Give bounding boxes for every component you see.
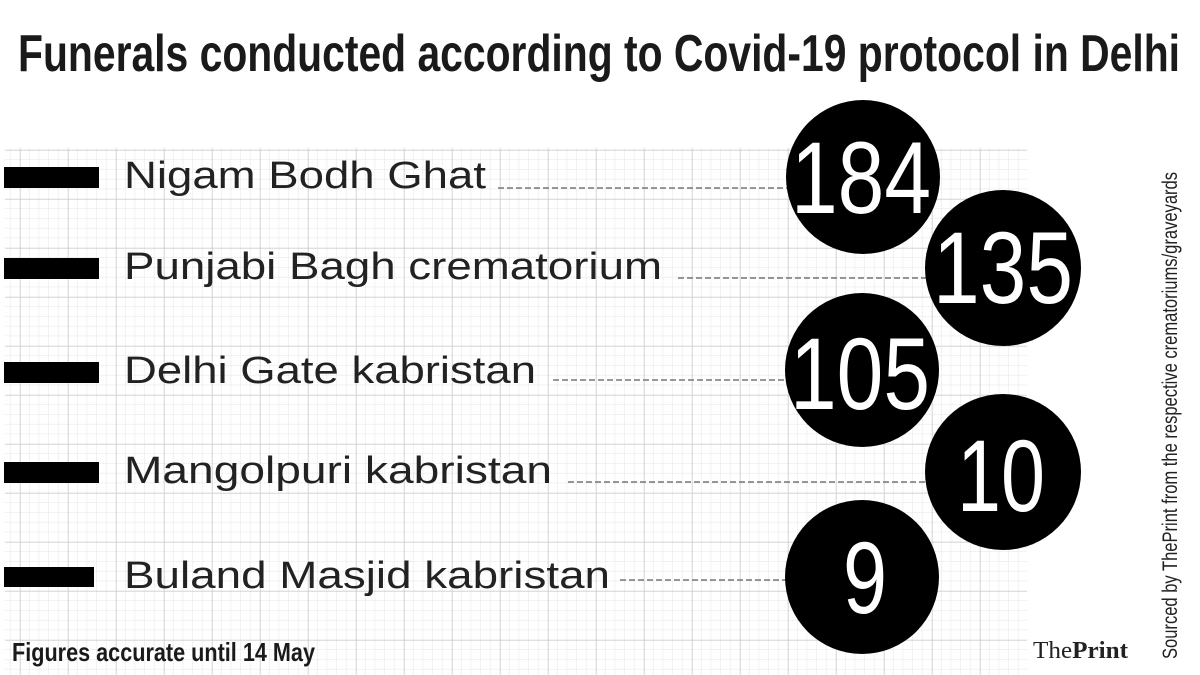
row: Delhi Gate kabristan: [4, 293, 939, 447]
row: Buland Masjid kabristan: 9: [843, 521, 887, 635]
row: Nigam Bodh Ghat: 184: [791, 121, 931, 235]
row: Buland Masjid kabristan: [4, 500, 939, 654]
row: Delhi Gate kabristan: 105: [790, 317, 930, 431]
row: Nigam Bodh Ghat: Nigam Bodh Ghat: [124, 155, 487, 197]
logo: ThePrint: ThePrint: [1033, 638, 1128, 664]
source note: Sourced by ThePrint from the respective crematoriums/graveyards: [1159, 172, 1182, 659]
row: Nigam Bodh Ghat: [4, 100, 940, 254]
footnote: Figures accurate until 14 May: [12, 637, 315, 667]
row: Mangolpuri kabristan: [4, 394, 1081, 550]
row: Delhi Gate kabristan: Delhi Gate kabristan: [124, 350, 536, 392]
row: Punjabi Bagh crematorium: 135: [933, 211, 1073, 325]
row: Mangolpuri kabristan: Mangolpuri kabristan: [124, 450, 552, 492]
row: Mangolpuri kabristan: 10: [957, 419, 1045, 533]
row: Punjabi Bagh crematorium: Punjabi Bagh crematorium: [124, 246, 662, 288]
row: Buland Masjid kabristan: Buland Masjid kabristan: [124, 555, 610, 597]
row: Punjabi Bagh crematorium: [4, 190, 1081, 346]
